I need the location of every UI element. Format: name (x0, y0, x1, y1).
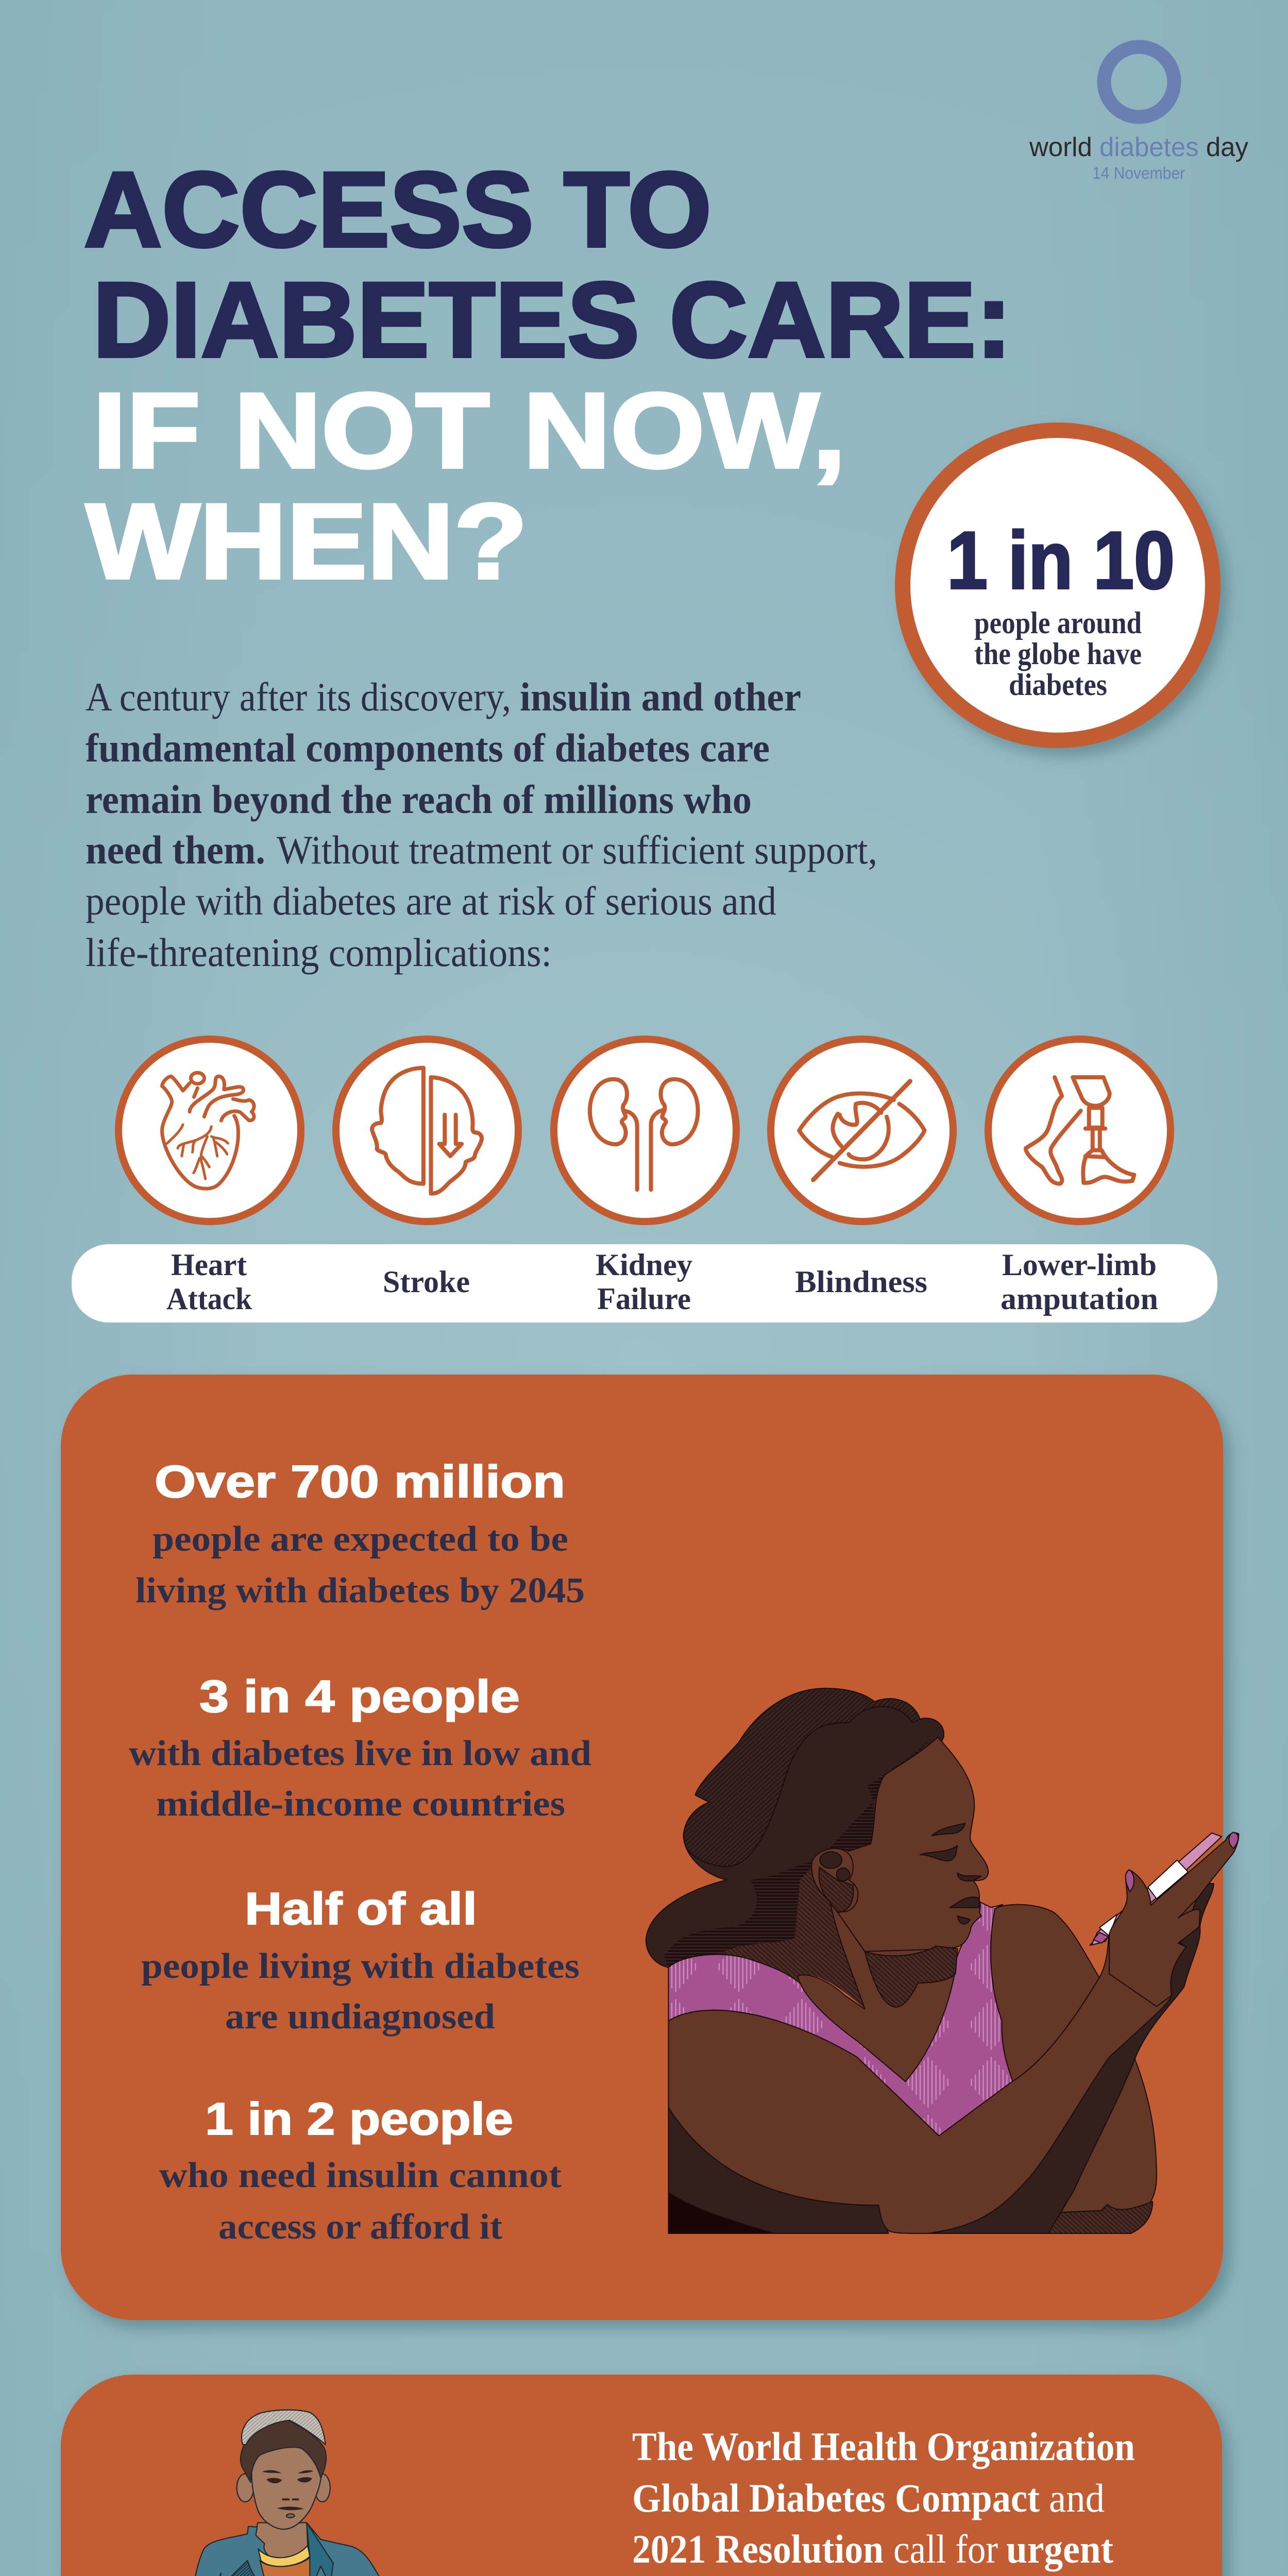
stat: 1 in 2 people (159, 2093, 562, 2247)
callout: 1 in 10 circle: the globe have (974, 637, 1142, 671)
stat: half of all (141, 1883, 580, 2037)
icon: lower-limb prosthesis (988, 1039, 1171, 1222)
text block: introduction: insulin and other (520, 674, 801, 719)
text block: WHO compact: Global Diabetes Compact (632, 2476, 1040, 2520)
panel: complication labels: Kidney (596, 1248, 692, 1282)
stat: 1 in 2 people: access or afford it (218, 2207, 502, 2247)
panel: complication labels: Blindness (795, 1265, 927, 1299)
stat: 3 in 4 people (129, 1671, 591, 1824)
stat: over 700 million: Over 700 million (155, 1456, 565, 1507)
text block: WHO compact: The World Health Organization (632, 2424, 1135, 2469)
title: IF NOT NOW, (93, 371, 846, 490)
text block: WHO compact: 2021 Resolution (632, 2527, 884, 2571)
title: WHEN? (86, 482, 528, 601)
stat: 3 in 4 people: with diabetes live in low and (129, 1734, 591, 1773)
icon: stroke head (336, 1039, 518, 1222)
stat: 1 in 2 people: who need insulin cannot (159, 2156, 562, 2195)
stat: over 700 million: living with diabetes by 2045 (135, 1571, 585, 1611)
stat: half of all: Half of all (245, 1883, 477, 1934)
text block: WHO compact: urgent (1006, 2527, 1113, 2571)
text block: introduction: Without treatment or sufficient support, (277, 827, 877, 872)
panel: complication labels: Failure (597, 1282, 691, 1316)
panel: complication labels: Stroke (383, 1265, 470, 1299)
text block: introduction: fundamental components of diabetes care (86, 725, 770, 770)
panel: statistics (61, 1375, 1239, 2320)
icon: crossed-out eye (771, 1039, 953, 1222)
text block: introduction (86, 674, 877, 975)
panel: complication labels: amputation (1001, 1282, 1158, 1316)
callout: 1 in 10 circle: people around (974, 606, 1142, 640)
title: DIABETES CARE: (93, 260, 1012, 379)
callout: 1 in 10 circle (903, 430, 1213, 740)
text block: introduction: need them. (86, 827, 265, 872)
stat: half of all: are undiagnosed (225, 1997, 495, 2037)
text block: introduction: A century after its discovery, (86, 674, 511, 719)
logo: World Diabetes Day (1029, 47, 1248, 182)
panel: complication labels: Attack (166, 1282, 252, 1316)
illustration: woman using insulin pen (646, 1688, 1239, 2233)
panel: complication labels (72, 1244, 1217, 1323)
title (84, 150, 1012, 601)
icon: heart (118, 1039, 301, 1222)
stat: half of all: people living with diabetes (141, 1946, 580, 1986)
callout: 1 in 10 circle: 1 in 10 (947, 515, 1175, 606)
title: ACCESS TO (84, 150, 711, 269)
logo: World Diabetes Day: 14 November (1092, 164, 1185, 182)
stat: 1 in 2 people: 1 in 2 people (205, 2093, 513, 2144)
text block: introduction: life-threatening complications: (86, 930, 552, 975)
icon: kidneys (554, 1039, 736, 1222)
stat: 3 in 4 people: middle-income countries (156, 1784, 565, 1824)
logo: World Diabetes Day: world diabetes day (1029, 132, 1248, 162)
callout: 1 in 10 circle: diabetes (1009, 668, 1107, 702)
stat: over 700 million: people are expected to be (152, 1519, 568, 1559)
stat: over 700 million (135, 1456, 585, 1611)
panel: complication labels: Heart (171, 1248, 247, 1282)
text block: introduction: remain beyond the reach of millions who (86, 777, 752, 822)
stat: 3 in 4 people: 3 in 4 people (199, 1671, 520, 1722)
panel: WHO compact (61, 2375, 1222, 2576)
text block: WHO compact: and (1049, 2476, 1105, 2520)
panel: complication labels: Lower-limb (1002, 1248, 1157, 1282)
illustration: man with bicycle and groceries (109, 2410, 591, 2576)
text block: introduction: people with diabetes are at risk of serious and (86, 878, 776, 923)
text block: WHO compact: call for (893, 2527, 998, 2571)
text block: WHO compact (632, 2424, 1187, 2576)
